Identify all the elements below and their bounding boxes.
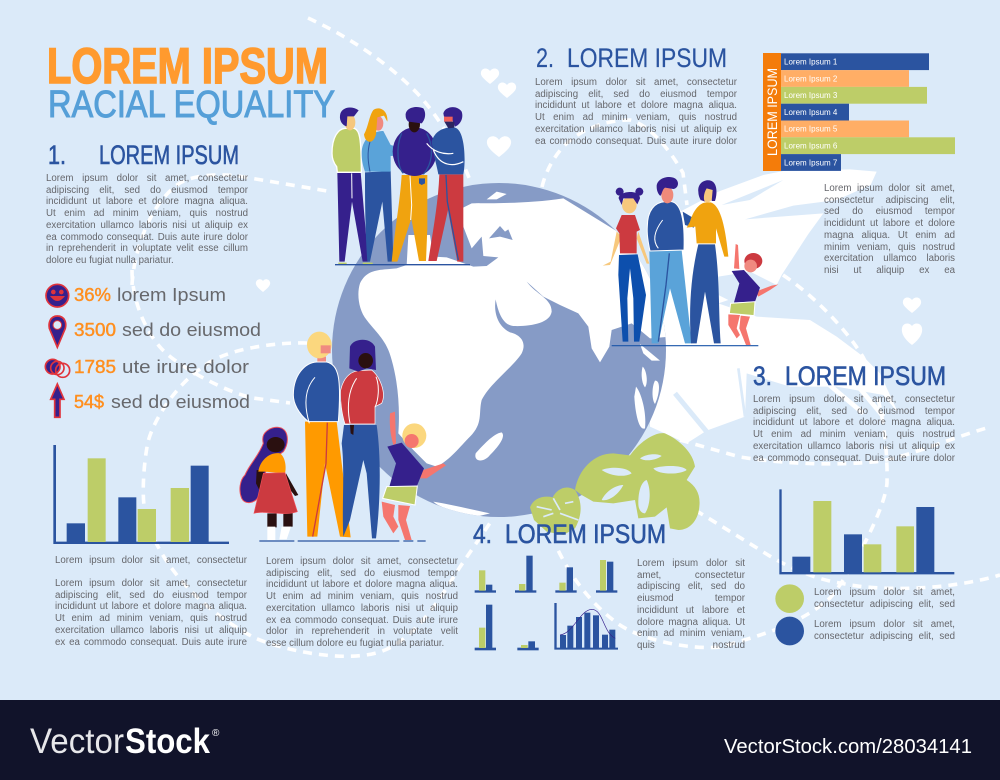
title: LOREM IPSUM [47,38,328,94]
text block: section 4: amet, consectetur [637,570,745,581]
statistics list [45,284,261,417]
horizontal bar chart: Lorem Ipsum 7 [784,158,838,167]
text block: under family [266,556,458,649]
small leaf [530,488,581,535]
ground lines [259,539,426,543]
stat: 3500 [74,320,261,340]
legend text: blue: consectetur adipiscing elit, sed [814,631,955,642]
text block: beside horizontal chart: Lorem ipsum dolor sit amet, [824,183,955,194]
person with blond hair [362,108,418,262]
VectorStock logo: Stock [125,722,210,761]
text block: section 4: adipiscing elit, sed do [637,581,745,592]
woman in yellow top [687,180,728,343]
caption: left chart: Lorem ipsum dolor sit amet, consectetur [55,555,247,566]
dancing child [728,244,778,345]
text block: under family: incididunt ut labore et dolore magna aliqua. [266,579,458,590]
blond man [293,332,351,537]
text block: section 1 [46,173,248,266]
text block: under family: Lorem ipsum dolor sit amet, consectetur [266,556,458,567]
text block: under family: esse cillum dolore eu fugiat nulla pariatur. [266,638,444,649]
blond child [382,412,446,540]
text block: section 4: quis nostrud [637,640,745,651]
text block: under family: ex ea commodo consequat. Duis aute irure [266,615,458,626]
stat: 3500: sed do eiusmod [122,320,261,340]
heading 2: 2. [536,43,554,73]
horizontal bar chart: Lorem Ipsum 2 [784,74,838,83]
heading 1 [48,140,239,170]
man in blue sweater [647,177,694,343]
text block: section 3: exercitation ullamco laboris nisi ut aliquip ex [753,441,955,452]
text block: section 3: Lorem ipsum dolor sit amet, consectetur [753,394,955,405]
icon: map pin [49,316,66,347]
family of three with child at the bottom [240,332,446,541]
bearded person in red trousers [427,107,465,262]
horizontal bar chart: LOREM IPSUM [764,68,780,156]
heading 1: 1. [48,140,66,170]
girl with hair buns [603,188,649,342]
text block: beside horizontal chart: sed do eiusmod tempor [824,206,955,217]
stat: 36% [74,285,226,305]
legend text: green: consectetur adipiscing elit, sed [814,599,955,610]
text block: section 3: Ut enim ad minim veniam, quis nostrud [753,429,955,440]
legend text: green [814,587,955,610]
text block: section 2: adipiscing elit, sed do eiusmod tempor [535,89,737,100]
stat: 54$: 54$ [74,392,104,412]
horizontal bar chart: Lorem Ipsum 4 [784,108,838,117]
text block: beside horizontal chart: minim veniam, quis nostrud [824,242,955,253]
monstera leaves [530,433,700,535]
heading 2: LOREM IPSUM [567,43,727,73]
stat: 36%: lorem Ipsum [117,285,226,305]
stat: 1785: 1785 [74,357,116,377]
family of three with child on the right [603,177,778,346]
white wing feathers [650,169,898,443]
horizontal bar chart: Lorem Ipsum 6 [784,142,838,150]
text block: under left chart: incididunt ut labore et dolore magna aliqua. [55,601,247,612]
large leaf [575,433,700,530]
text block: section 4 [637,558,745,651]
legend text: blue: Lorem ipsum dolor sit amet, [814,619,955,630]
text block: section 1: incididunt ut labore et dolore magna aliqua. [46,196,248,207]
stat: 3500: 3500 [74,320,116,340]
heading 3: 3. [753,361,772,391]
VectorStock logo [30,722,220,761]
text block: section 1: in reprehenderit in voluptate velit esse cillum [46,243,248,254]
hearts [256,68,922,345]
text block: section 3 [753,394,955,464]
title [47,38,335,126]
text block: under family: exercitation ullamco laboris nisi ut aliquip [266,603,458,614]
text block: beside horizontal chart: incididunt ut labore et dolore [824,218,955,229]
text block: section 2: Ut enim ad minim veniam, quis nostrud [535,112,737,123]
text block: beside horizontal chart: exercitation ullamco laboris [824,253,955,264]
text block: under left chart: adipiscing elit, sed do eiusmod tempor [55,590,247,601]
stat: 1785 [74,357,249,377]
text block: beside horizontal chart [824,183,955,276]
text block: section 1: ea commodo consequat. Duis aute irure dolor [46,232,248,243]
histogram with curve [554,603,618,650]
text block: section 4: incididunt ut labore et [637,605,745,616]
girl with long hair [240,427,298,540]
text block: section 2: ea commodo consequat. Duis aute irure dolor [535,136,737,147]
bar chart: left [53,445,229,544]
text block: beside horizontal chart: magna aliqua. Ut enim ad [824,230,955,241]
text block: section 2: exercitation ullamco laboris nisi ut aliquip ex [535,124,737,135]
group of four adults on top [332,107,470,265]
text block: under family: Ut enim ad minim veniam, quis nostrud [266,591,458,602]
ground line [335,263,470,267]
legend dots [775,584,804,645]
horizontal bar chart: Lorem Ipsum 3 [784,91,838,100]
person in green sweater [332,108,373,264]
text block: section 2: Lorem ipsum dolor sit amet, consectetur [535,77,737,88]
globe [332,183,680,517]
woman in red sweater [341,340,383,538]
text block: section 3: ea commodo consequat. Duis aute irure dolor [753,453,955,464]
legend text: green: Lorem ipsum dolor sit amet, [814,587,955,598]
text block: section 1: dolore eu fugiat nulla pariatur. [46,255,174,266]
text block: section 2: incididunt ut labore et dolore magna aliqua. [535,100,737,111]
stat: 36%: 36% [74,285,111,305]
text block: section 4: eiusmod tempor [637,593,745,604]
text block: under family: adipiscing elit, sed do eiusmod tempor [266,568,458,579]
text block: under family: dolor in reprehenderit in voluptate velit [266,626,458,637]
legend text: blue [814,619,955,642]
text block: section 1: adipiscing elit, sed do eiusmod tempor [46,185,248,196]
VectorStock logo: Vector [30,722,124,761]
text block: under left chart: Ut enim ad minim veniam, quis nostrud [55,613,247,624]
text block: under left chart: Lorem ipsum dolor sit amet, consectetur [55,578,247,589]
stat: 54$: sed do eiusmod [111,392,250,412]
text block: section 1: exercitation ullamco laboris nisi ut aliquip ex [46,220,248,231]
text block: section 2 [535,77,737,147]
title: RACIAL EQUALITY [48,84,335,126]
text block: section 3: incididunt ut labore et dolore magna aliqua. [753,417,955,428]
horizontal bar chart [763,53,955,171]
text block: section 1: Lorem ipsum dolor sit amet, consectetur [46,173,248,184]
text block: section 3: adipiscing elit, sed do eiusmod tempor [753,406,955,417]
ground line [612,344,758,347]
horizontal bar chart: Lorem Ipsum 5 [784,125,838,134]
stat: 1785: ute irure dolor [122,357,249,377]
icon: rings [45,359,70,377]
small bar charts [475,556,618,650]
image id: VectorStock.com/28034141 [724,736,972,758]
VectorStock logo: ® [212,728,220,739]
bar chart: right [779,489,954,574]
text block: section 4: Lorem ipsum dolor sit [637,558,745,569]
text block: beside horizontal chart: consectetur adipiscing elit, [824,195,955,206]
footer band [0,700,1000,780]
text block: section 4: enim ad minim veniam, [637,628,745,639]
text block: beside horizontal chart: nisi ut aliquip ex ea [824,265,955,276]
text block: under left chart: ex ea commodo consequat. Duis aute irure [55,637,247,648]
heading 3: LOREM IPSUM [785,361,946,391]
dashed connector lines [132,18,1000,656]
text block: section 4: dolore magna aliqua. Ut [637,617,745,628]
person in purple sweater seen from the back [392,107,437,262]
text block: section 1: Ut enim ad minim veniam, quis nostrud [46,208,248,219]
heading 4: LOREM IPSUM [505,519,666,549]
heading 1: LOREM IPSUM [99,140,239,170]
icon: up arrow [51,384,64,417]
horizontal bar chart: Lorem Ipsum 1 [784,58,838,66]
text block: under left chart: exercitation ullamco laboris nisi ut aliquip [55,625,247,636]
icon: smiley [46,284,69,307]
text block: under left chart [55,578,247,648]
heading 4: 4. [473,519,492,549]
